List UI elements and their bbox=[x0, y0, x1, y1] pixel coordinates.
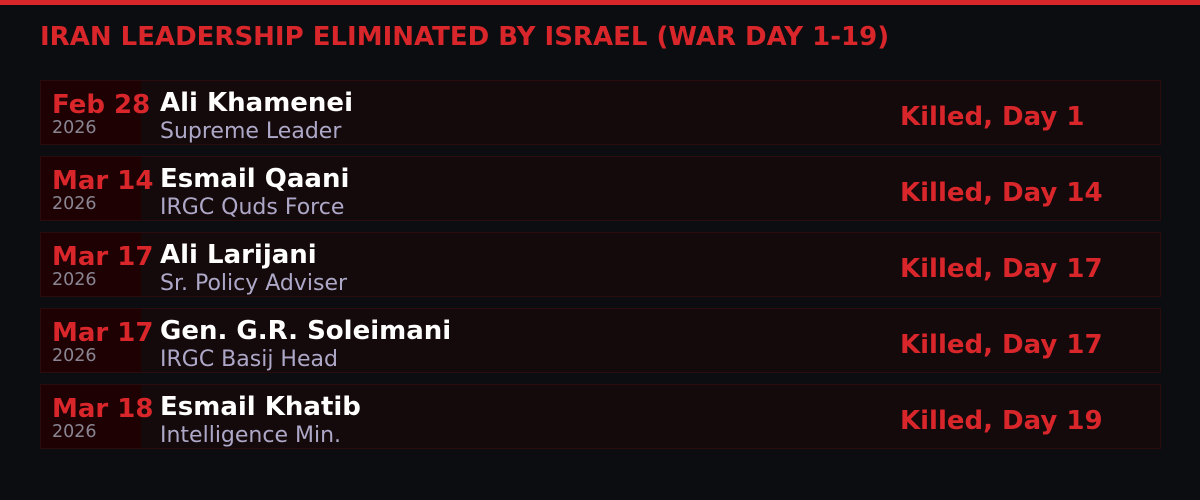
date box bbox=[41, 81, 141, 144]
row: Soleimani bbox=[40, 308, 1161, 373]
row: Larijani bbox=[40, 232, 1161, 297]
role: Sr. Policy Adviser bbox=[160, 271, 347, 296]
name: Esmail Khatib bbox=[160, 392, 361, 422]
row: Khamenei bbox=[40, 80, 1161, 145]
date box: 2026 bbox=[52, 346, 97, 366]
date box: Mar 18 bbox=[52, 394, 153, 424]
date box: 2026 bbox=[52, 194, 97, 214]
name: Gen. G.R. Soleimani bbox=[160, 316, 451, 346]
date box bbox=[41, 233, 141, 296]
row: Qaani bbox=[40, 156, 1161, 221]
status: Killed, Day 1 bbox=[900, 102, 1084, 132]
role: Supreme Leader bbox=[160, 119, 341, 144]
name: Esmail Qaani bbox=[160, 164, 349, 194]
date box: Mar 17 bbox=[52, 318, 153, 348]
role: IRGC Quds Force bbox=[160, 195, 344, 220]
title: IRAN LEADERSHIP ELIMINATED BY ISRAEL (WAR DAY 1-19) bbox=[40, 22, 889, 52]
name: Ali Khamenei bbox=[160, 88, 353, 118]
date box bbox=[41, 309, 141, 372]
row: Khatib bbox=[40, 384, 1161, 449]
date box: 2026 bbox=[52, 422, 97, 442]
date box: Mar 14 bbox=[52, 166, 153, 196]
date box bbox=[41, 385, 141, 448]
status: Killed, Day 17 bbox=[900, 330, 1103, 360]
date box: 2026 bbox=[52, 270, 97, 290]
role: IRGC Basij Head bbox=[160, 347, 338, 372]
date box: 2026 bbox=[52, 118, 97, 138]
date box bbox=[41, 157, 141, 220]
status: Killed, Day 14 bbox=[900, 178, 1103, 208]
date box: Feb 28 bbox=[52, 90, 150, 120]
role: Intelligence Min. bbox=[160, 423, 341, 448]
status: Killed, Day 17 bbox=[900, 254, 1103, 284]
status: Killed, Day 19 bbox=[900, 406, 1103, 436]
date box: Mar 17 bbox=[52, 242, 153, 272]
name: Ali Larijani bbox=[160, 240, 317, 270]
